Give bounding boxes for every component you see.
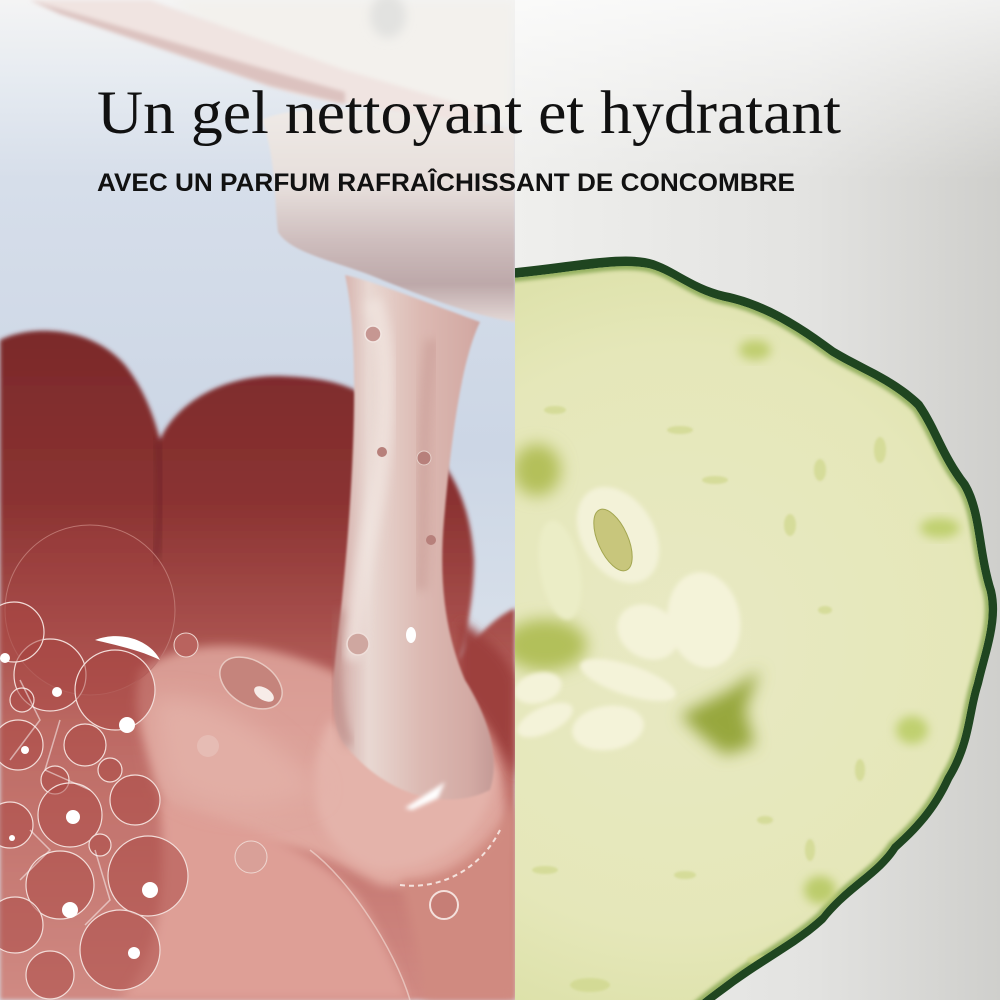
seed — [593, 508, 633, 572]
bottle tip — [262, 109, 515, 322]
gel highlights and droplets — [174, 633, 500, 1000]
gel pool on palm — [120, 620, 515, 1000]
hand silhouette — [0, 331, 515, 1000]
pump nozzle — [30, 0, 515, 130]
soap foam bubbles — [0, 525, 188, 999]
seed cavities — [515, 486, 742, 752]
gel stream — [333, 275, 494, 800]
left photo panel: gel and hand — [0, 0, 515, 1000]
flesh — [515, 266, 989, 1000]
background: grey textured surface — [515, 0, 1000, 1000]
cucumber slice — [515, 256, 998, 1000]
title: Un gel nettoyant et hydratant — [97, 80, 841, 147]
right photo panel: cucumber — [470, 0, 1000, 1000]
background: pale blue backdrop — [0, 0, 515, 1000]
subtitle: AVEC UN PARFUM RAFRAÎCHISSANT DE CONCOMBRE — [97, 167, 795, 197]
flesh flecks — [532, 406, 886, 992]
rind — [470, 257, 997, 1000]
